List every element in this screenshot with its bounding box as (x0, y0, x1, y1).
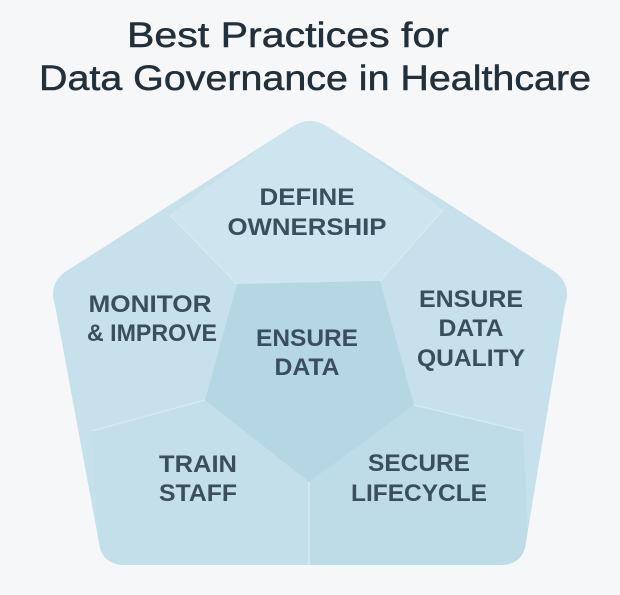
labels: DATA (438, 315, 504, 342)
title: Data Governance in Healthcare (39, 59, 591, 98)
segment: define ownership (266, 121, 354, 144)
labels: & IMPROVE (87, 320, 217, 347)
labels: LIFECYCLE (351, 480, 487, 507)
segment: train staff (98, 535, 124, 565)
labels: TRAIN (159, 451, 237, 478)
title: Best Practices for (127, 16, 449, 55)
segment: secure lifecycle (500, 533, 528, 565)
labels: MONITOR (88, 291, 212, 318)
center pentagon (205, 281, 414, 482)
pentagon diagram (53, 121, 567, 565)
labels: ENSURE (256, 325, 358, 352)
labels: ENSURE (419, 286, 523, 313)
labels: QUALITY (417, 345, 525, 372)
title (39, 16, 591, 98)
labels: SECURE (368, 450, 470, 477)
labels: DEFINE (260, 184, 354, 211)
labels: STAFF (159, 480, 237, 507)
labels: DATA (274, 354, 340, 381)
labels: OWNERSHIP (228, 214, 386, 241)
labels (87, 184, 525, 507)
